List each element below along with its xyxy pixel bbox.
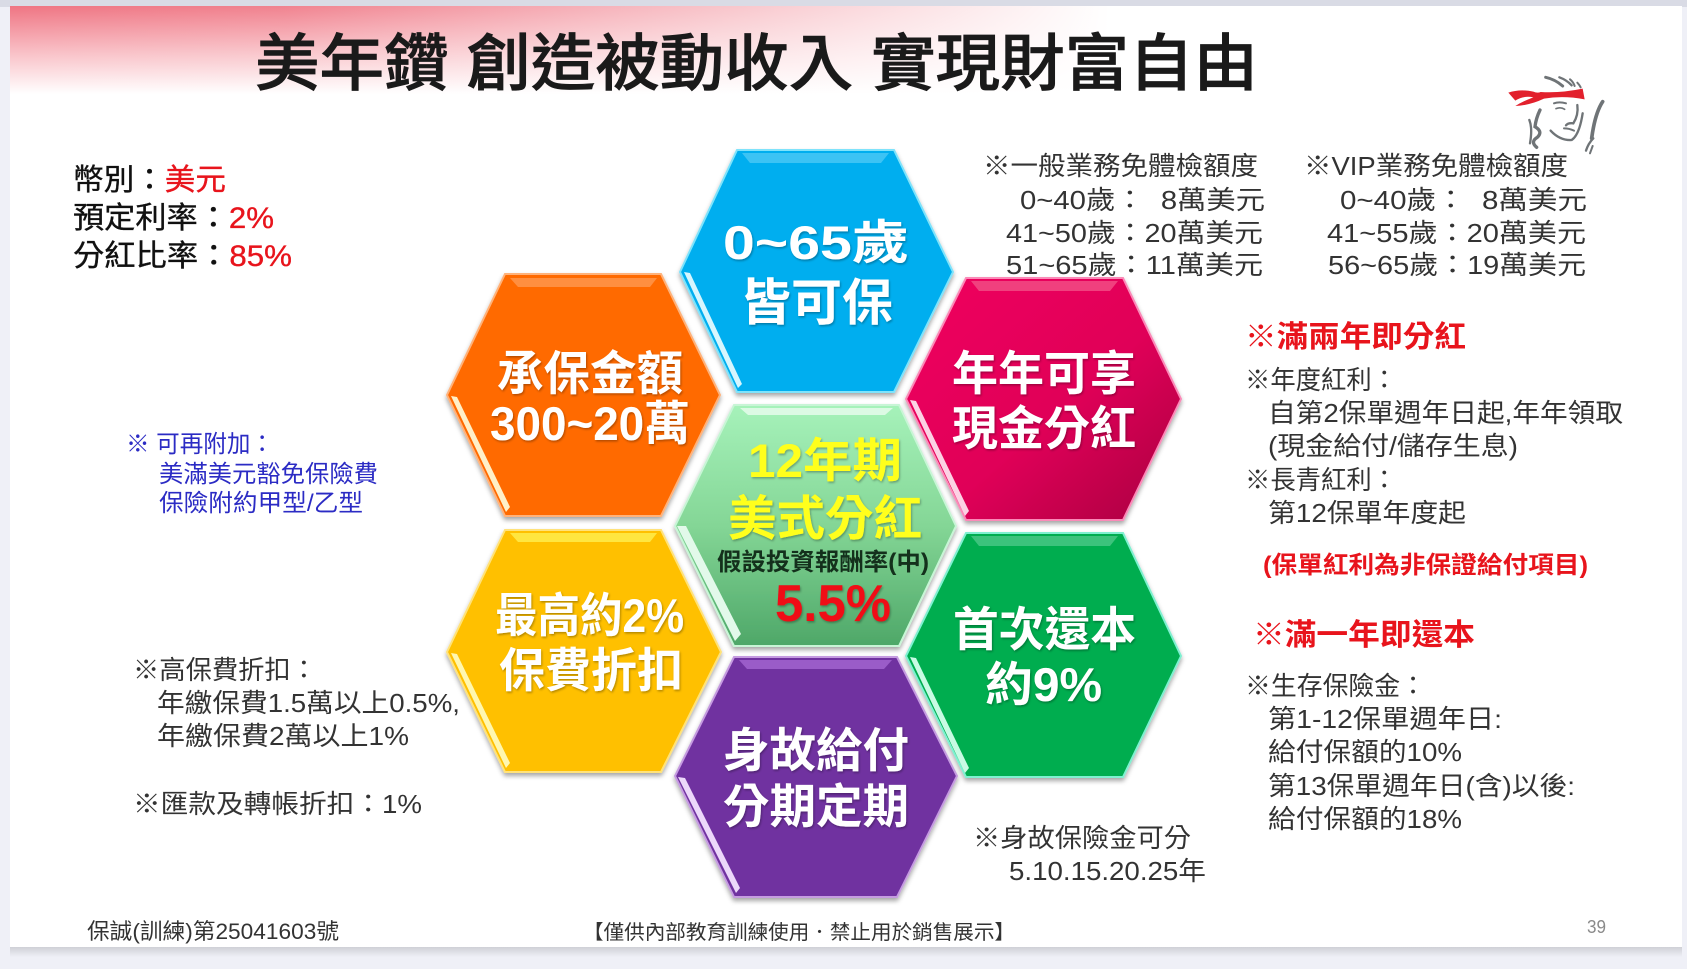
- hexagon: center product term: 假設投資報酬率(中): [717, 549, 929, 576]
- text block: VIP exam-free limits: ※VIP業務免體檢額度: [1304, 151, 1568, 181]
- hexagon: premium discount: 保費折扣: [499, 644, 683, 697]
- text block: VIP exam-free limits: [1304, 151, 1587, 280]
- text block: dividend after two years: [1245, 321, 1623, 579]
- hexagon: age range: 0~65歲: [723, 216, 909, 269]
- text block: optional riders: ※ 可再附加：: [126, 431, 274, 458]
- text block: premium discount notes: 年繳保費1.5萬以上0.5%,: [157, 688, 460, 718]
- text block: premium discount notes: [133, 655, 460, 819]
- hexagon: sum insured: 承保金額: [497, 347, 683, 400]
- footer: internal use notice: 【僅供內部教育訓練使用．禁止用於銷售展示】: [583, 921, 1015, 944]
- text block: dividend after two years: 自第2保單週年日起,年年領取: [1268, 398, 1623, 428]
- hexagon: death benefit installments: [675, 657, 957, 897]
- text block: general exam-free limits: [983, 151, 1265, 280]
- text block: general exam-free limits: 51~65歲：11萬美元: [1006, 250, 1263, 280]
- text block: product basics: 預定利率：2%: [73, 202, 274, 235]
- text block: death benefit terms: 5.10.15.20.25年: [1009, 856, 1206, 886]
- hexagon: first capital return: [906, 533, 1181, 777]
- text block: VIP exam-free limits: 56~65歲：19萬美元: [1328, 250, 1586, 280]
- text block: death benefit terms: [973, 823, 1206, 886]
- hexagon: sum insured: 300~20萬: [490, 397, 690, 450]
- text block: optional riders: 美滿美元豁免保險費: [159, 461, 378, 488]
- hexagon: first capital return: 約9%: [985, 658, 1102, 711]
- page number: 39: [1587, 917, 1606, 937]
- hexagon: center product term: 5.5%: [775, 575, 891, 633]
- hexagon: death benefit installments: 分期定期: [723, 780, 909, 833]
- text block: capital return after one year: ※生存保險金：: [1245, 671, 1426, 701]
- text block: capital return after one year: 第1-12保單週年日:: [1268, 704, 1502, 734]
- title: 美年鑽 創造被動收入 實現財富自由: [255, 30, 1258, 99]
- footer: approval number: 保誠(訓練)第25041603號: [87, 919, 339, 944]
- text block: dividend after two years: ※長青紅利：: [1245, 465, 1397, 495]
- text block: VIP exam-free limits: 0~40歲： 8萬美元: [1340, 185, 1587, 215]
- text block: VIP exam-free limits: 41~55歲：20萬美元: [1327, 218, 1586, 248]
- text block: dividend after two years: (現金給付/儲存生息): [1268, 431, 1518, 461]
- text block: premium discount notes: ※匯款及轉帳折扣：1%: [133, 789, 422, 819]
- text block: product basics: [73, 164, 292, 273]
- text block: optional riders: [126, 431, 378, 517]
- text block: dividend after two years: (保單紅利為非保證給付項目): [1263, 552, 1588, 579]
- text block: dividend after two years: ※年度紅利：: [1245, 365, 1397, 395]
- text block: product basics: 分紅比率：85%: [73, 240, 292, 273]
- text block: general exam-free limits: ※一般業務免體檢額度: [983, 151, 1258, 181]
- icon: Prudential logo head: [1508, 77, 1603, 153]
- hexagon: center product term: 12年期: [748, 434, 902, 487]
- hexagon: age range: [680, 150, 953, 392]
- hexagon: annual cash dividend: [906, 278, 1181, 520]
- hexagon: first capital return: 首次還本: [953, 603, 1136, 656]
- hexagon: sum insured: [447, 274, 720, 516]
- hexagon: age range: 皆可保: [740, 275, 893, 331]
- hexagon: annual cash dividend: 現金分紅: [952, 402, 1136, 455]
- hexagon: center product term: 美式分紅: [728, 493, 922, 546]
- text block: premium discount notes: ※高保費折扣：: [133, 655, 317, 685]
- text block: general exam-free limits: 0~40歲： 8萬美元: [1020, 185, 1265, 215]
- hexagon: premium discount: [447, 530, 721, 772]
- hexagon: center product term: [675, 405, 956, 646]
- hexagon: premium discount: 最高約2%: [495, 589, 684, 642]
- hexagon: death benefit installments: 身故給付: [723, 724, 909, 777]
- text block: premium discount notes: 年繳保費2萬以上1%: [157, 721, 409, 751]
- hexagon: annual cash dividend: 年年可享: [952, 347, 1136, 400]
- text block: capital return after one year: [1245, 619, 1575, 834]
- text block: death benefit terms: ※身故保險金可分: [973, 823, 1191, 853]
- text block: general exam-free limits: 41~50歲：20萬美元: [1006, 218, 1263, 248]
- text block: capital return after one year: 給付保額的18%: [1268, 804, 1462, 834]
- text block: capital return after one year: ※滿一年即還本: [1253, 619, 1475, 652]
- text block: dividend after two years: ※滿兩年即分紅: [1245, 321, 1466, 354]
- text block: capital return after one year: 第13保單週年日(含)以後:: [1268, 771, 1575, 801]
- text block: product basics: 幣別：美元: [73, 164, 226, 197]
- text block: optional riders: 保險附約甲型/乙型: [159, 490, 363, 517]
- text block: capital return after one year: 給付保額的10%: [1268, 737, 1462, 767]
- text block: dividend after two years: 第12保單年度起: [1268, 498, 1466, 528]
